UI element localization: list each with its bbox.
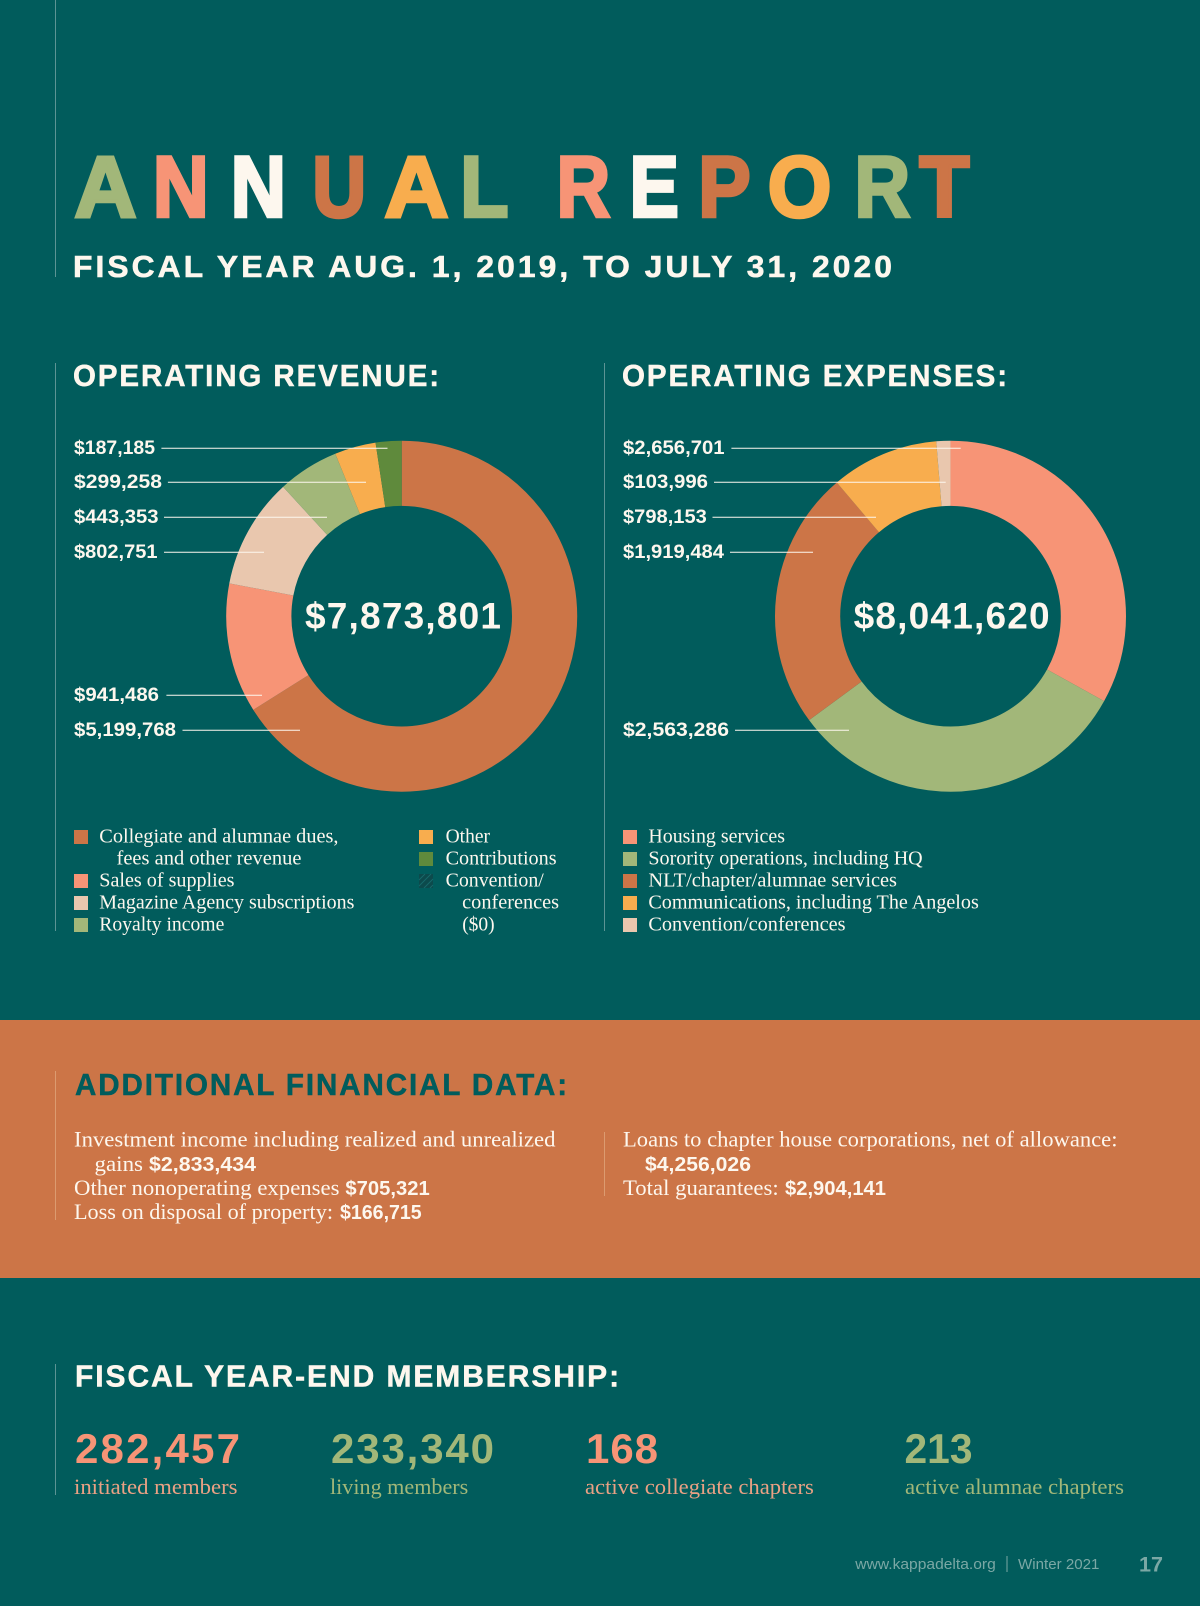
title: E: [630, 140, 679, 236]
stat: initiated members: 282,457: [75, 1425, 240, 1472]
stat: living members: living members: [330, 1474, 468, 1499]
title: L: [460, 140, 508, 236]
legend: revenue: Other: [446, 826, 490, 848]
value labels: revenue: $299,258: [74, 471, 162, 493]
footer: Winter 2021: [1018, 1556, 1099, 1573]
heading: operating expenses: OPERATING EXPENSES:: [622, 358, 1009, 393]
financial data: left column: gains: [94, 1151, 143, 1176]
stat: active alumnae chapters: [904, 1425, 1124, 1499]
legend: expenses: Housing services: [648, 826, 785, 848]
financial data: left column: Investment income including realized and unrealized: [74, 1127, 556, 1152]
legend: expenses: [623, 826, 979, 936]
title: A: [74, 140, 136, 236]
legend: expenses: NLT/chapter/alumnae services: [648, 870, 897, 892]
title: R: [854, 140, 910, 236]
stat: active collegiate chapters: [585, 1425, 814, 1499]
stat: active alumnae chapters: 213: [904, 1425, 972, 1472]
financial data: left column: Loss on disposal of property:: [74, 1199, 333, 1224]
financial data: left column: [74, 1127, 556, 1224]
legend: revenue: Sales of supplies: [99, 870, 235, 892]
title: A: [384, 140, 448, 236]
footer: www.kappadelta.org: [854, 1556, 996, 1573]
heading: operating revenue: OPERATING REVENUE:: [73, 358, 441, 393]
financial data: right column: [623, 1127, 1118, 1200]
legend: revenue: Collegiate and alumnae dues,: [99, 826, 338, 848]
title: N: [231, 140, 286, 236]
value labels: revenue: $5,199,768: [74, 719, 176, 741]
title: [74, 140, 969, 236]
value labels: revenue: $443,353: [74, 506, 159, 528]
subtitle: FISCAL YEAR AUG. 1, 2019, TO JULY 31, 2020: [73, 249, 895, 284]
legend: revenue: Convention/: [446, 870, 544, 892]
footer: 17: [1139, 1554, 1163, 1577]
financial data: right column: $4,256,026: [645, 1153, 751, 1176]
stat: active alumnae chapters: active alumnae chapters: [905, 1474, 1124, 1499]
stat: initiated members: [74, 1425, 240, 1499]
donut chart: revenue: [200, 414, 604, 818]
value labels: expenses: $1,919,484: [623, 541, 724, 563]
panel: additional financial data: [0, 1020, 1200, 1278]
donut total: expenses: $8,041,620: [854, 595, 1050, 636]
legend: revenue: Contributions: [446, 848, 557, 870]
financial data: left column: $166,715: [340, 1201, 422, 1224]
legend: revenue: conferences: [462, 892, 559, 914]
financial data: left column: Other nonoperating expenses: [74, 1175, 340, 1200]
title: T: [919, 140, 969, 236]
title: O: [768, 140, 832, 236]
legend: revenue: Magazine Agency subscriptions: [99, 892, 355, 914]
donut total: revenue: $7,873,801: [305, 595, 501, 636]
title: U: [312, 140, 366, 236]
donut chart: expenses: [749, 415, 1152, 818]
legend: revenue: Royalty income: [99, 914, 224, 936]
legend: revenue: [74, 826, 559, 936]
panel: operating revenue: [73, 358, 604, 936]
value labels: expenses: $103,996: [623, 471, 708, 493]
financial data: right column: $2,904,141: [785, 1177, 886, 1200]
value labels: expenses: [623, 437, 961, 741]
value labels: expenses: $2,656,701: [623, 437, 725, 459]
value labels: revenue: $802,751: [74, 541, 158, 563]
panel: operating expenses: [622, 358, 1152, 936]
legend: expenses: Communications, including The Angelos: [648, 892, 979, 914]
stat: initiated members: initiated members: [74, 1474, 238, 1499]
financial data: right column: Total guarantees:: [623, 1175, 779, 1200]
financial data: left column: $705,321: [345, 1177, 430, 1200]
stat: living members: [330, 1425, 494, 1499]
legend: revenue: ($0): [462, 914, 495, 936]
legend: expenses: Convention/conferences: [648, 914, 846, 936]
value labels: expenses: $798,153: [623, 506, 707, 528]
title: N: [153, 140, 209, 236]
value labels: expenses: $2,563,286: [623, 719, 729, 741]
heading: fiscal year-end membership: FISCAL YEAR-END MEMBERSHIP:: [75, 1359, 621, 1394]
footer: [854, 1554, 1163, 1577]
financial data: right column: Loans to chapter house corporations, net of allowance:: [623, 1127, 1118, 1152]
title: P: [698, 140, 751, 236]
stat: active collegiate chapters: active collegiate chapters: [585, 1474, 814, 1499]
stat: living members: 233,340: [331, 1425, 494, 1472]
legend: revenue: fees and other revenue: [116, 848, 302, 870]
heading: additional financial data: ADDITIONAL FINANCIAL DATA:: [75, 1067, 569, 1102]
value labels: revenue: [74, 437, 388, 741]
value labels: revenue: $941,486: [74, 684, 159, 706]
value labels: revenue: $187,185: [74, 437, 155, 459]
panel: fiscal year-end membership: [56, 1359, 1124, 1499]
stat: active collegiate chapters: 168: [586, 1425, 658, 1472]
financial data: left column: $2,833,434: [149, 1153, 257, 1176]
legend: expenses: Sorority operations, including HQ: [648, 848, 923, 870]
title: R: [557, 140, 610, 236]
